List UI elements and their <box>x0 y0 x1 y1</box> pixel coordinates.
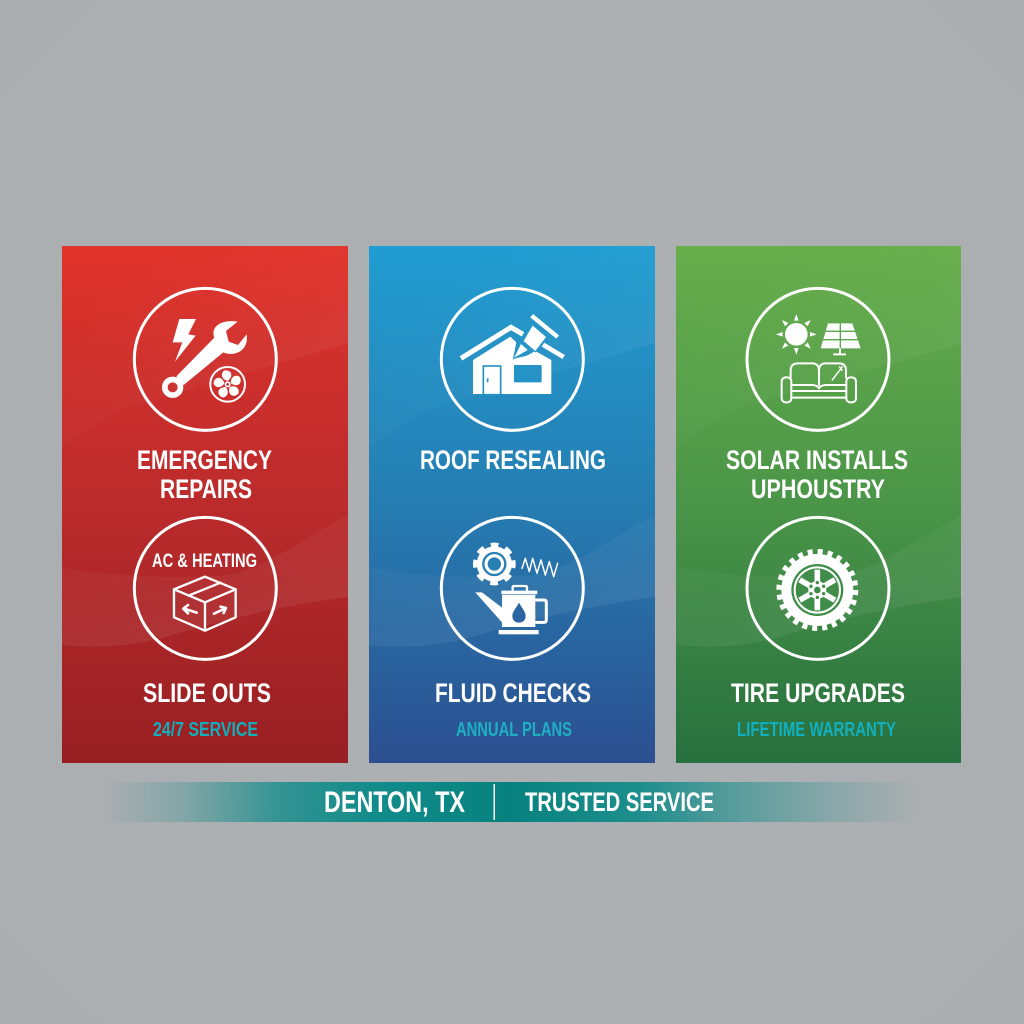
icon: roof resealing badge <box>441 288 583 430</box>
icon: fluid checks badge <box>441 517 583 659</box>
icon: solar installs and upholstery badge <box>747 288 889 430</box>
icon: tire badge <box>747 517 889 659</box>
heading: slide outs: SLIDE OUTS <box>143 678 271 708</box>
panel: red services <box>62 246 348 763</box>
tagline: lifetime warranty: LIFETIME WARRANTY <box>737 719 896 741</box>
heading: fluid checks: FLUID CHECKS <box>435 678 591 708</box>
heading: emergency repairs <box>137 445 272 504</box>
icon: slide outs badge <box>134 517 276 659</box>
panel: green services <box>676 246 962 763</box>
icon: emergency repairs badge <box>134 288 276 430</box>
banner location text: DENTON, TX <box>324 786 465 819</box>
heading: emergency repairs: EMERGENCY <box>137 445 272 475</box>
heading: emergency repairs: REPAIRS <box>160 474 252 504</box>
heading: solar installs uphoustry <box>726 445 908 504</box>
footer banner <box>100 782 920 822</box>
tagline: annual plans: ANNUAL PLANS <box>456 719 572 741</box>
heading: solar installs uphoustry: SOLAR INSTALLS <box>726 445 908 475</box>
tagline: 24/7 service: 24/7 SERVICE <box>153 719 258 741</box>
heading: tire upgrades: TIRE UPGRADES <box>731 678 905 708</box>
label: ac and heating: AC & HEATING <box>152 550 257 572</box>
panel: blue services <box>369 246 655 763</box>
heading: roof resealing: ROOF RESEALING <box>420 445 606 475</box>
heading: solar installs uphoustry: UPHOUSTRY <box>751 474 885 504</box>
banner tagline text: TRUSTED SERVICE <box>525 787 714 817</box>
